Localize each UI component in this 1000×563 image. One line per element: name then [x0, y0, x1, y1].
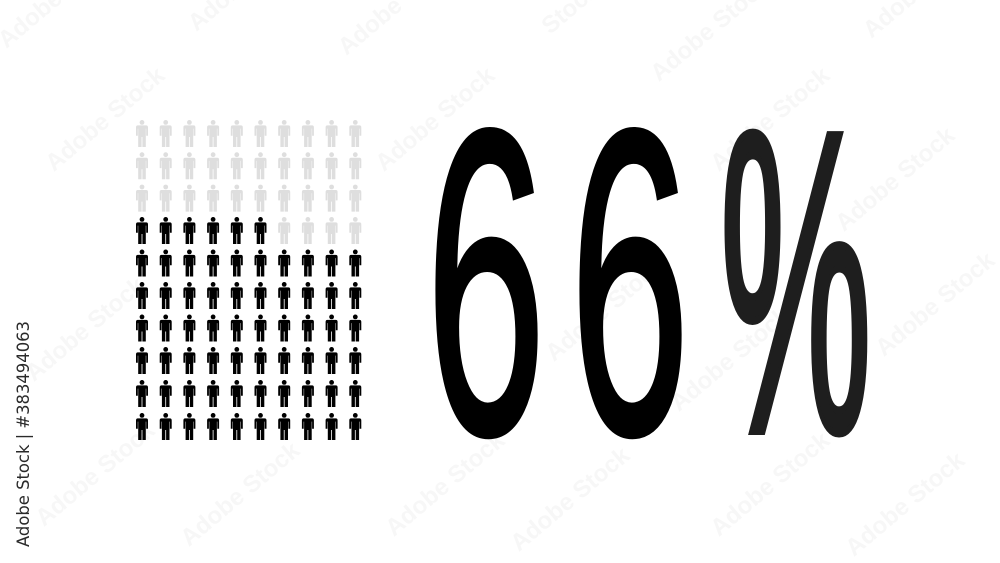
watermark pattern: Adobe Stock — [175, 436, 306, 552]
pictogram: light grey people — [136, 120, 361, 244]
pictogram: black people (66) — [136, 217, 361, 440]
watermark pattern: Adobe Stock — [505, 441, 636, 557]
watermark pattern: Adobe Stock — [540, 251, 671, 367]
watermark pattern: Adobe Stock — [370, 61, 501, 177]
big number 66: 6 — [570, 42, 690, 524]
watermark pattern: Adobe Stock — [705, 61, 836, 177]
watermark pattern: Adobe Stock — [380, 426, 511, 542]
watermark pattern: Adobe Stock — [830, 121, 961, 237]
watermark pattern: Adobe Stock — [705, 426, 836, 542]
watermark pattern: Adobe Stock — [665, 301, 796, 417]
side credit text: Adobe Stock | #383494063 — [14, 321, 34, 547]
watermark pattern: Adobe Stock — [840, 446, 971, 562]
percent sign: % — [720, 43, 872, 523]
big number 66 — [426, 42, 690, 524]
watermark pattern: Adobe Stock — [20, 271, 151, 387]
watermark pattern: Adobe Stock — [40, 61, 171, 177]
big number 66: 6 — [426, 42, 546, 524]
watermark pattern: Adobe Stock — [870, 246, 1000, 362]
watermark pattern: Adobe Stock — [30, 416, 161, 532]
